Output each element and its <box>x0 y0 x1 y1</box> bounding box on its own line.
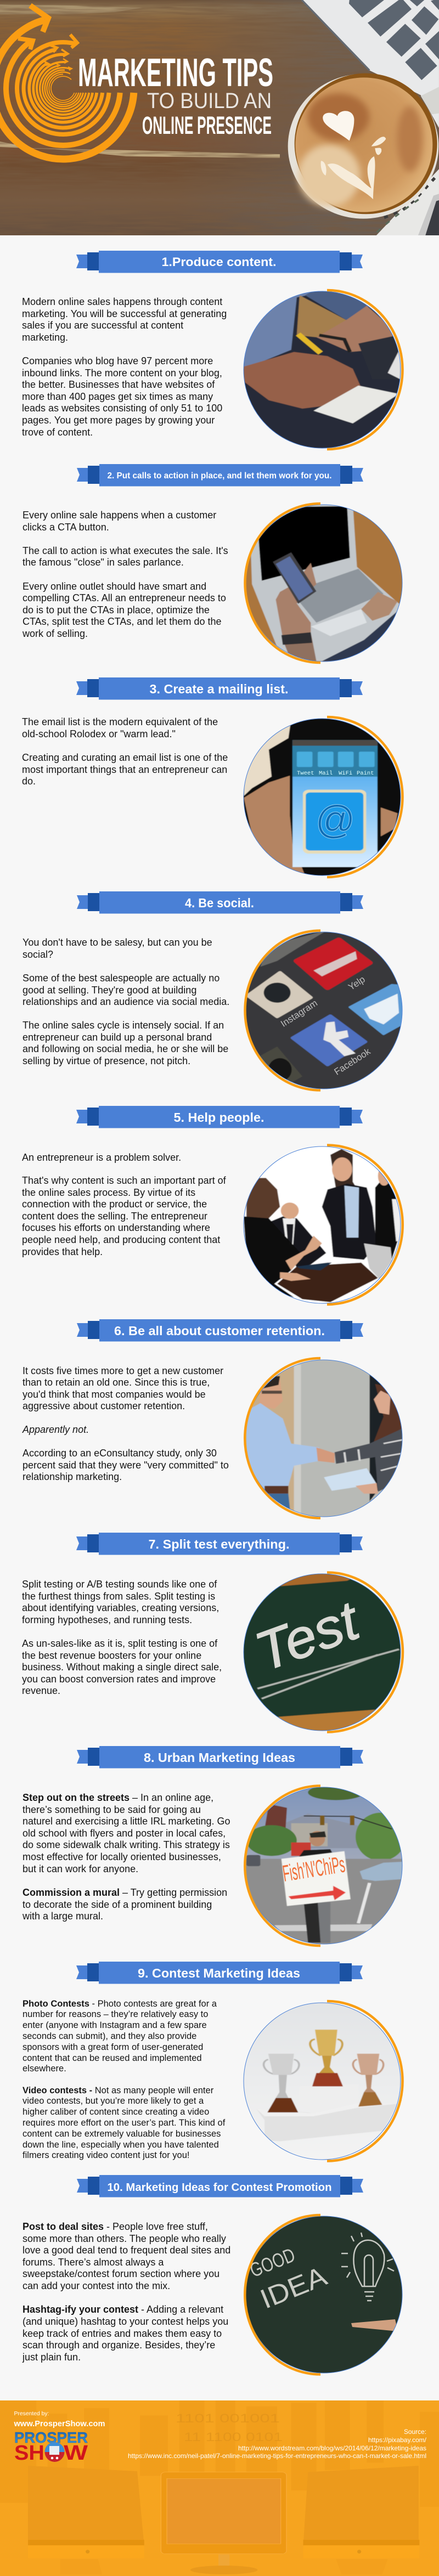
text: step out on the streets: most effective for locally oriented businesses, <box>22 1851 221 1862</box>
text: revenue boosters <box>22 1638 222 1697</box>
presenter text: Presented by: <box>14 2410 49 2417</box>
text: photo contests: content that can be reused and implemented <box>22 2053 202 2063</box>
text: split testing intro <box>22 1579 219 1626</box>
text: revenue boosters: revenue. <box>22 1685 60 1696</box>
section 2: calls to action <box>22 464 403 664</box>
text: split testing intro: Split testing or A/B testing sounds like one of <box>22 1579 217 1590</box>
text: post to deal sites: can add your contest into the mix. <box>22 2280 170 2291</box>
text: content role: people need help, and producing content that <box>22 1234 220 1245</box>
banner: 9. Contest Marketing Ideas <box>76 1962 363 1984</box>
text: photo contests: enter (anyone with Instagram and a few spare <box>22 2020 207 2030</box>
photo: chalkboard with test: Test <box>247 1589 369 1683</box>
text: revenue boosters: the best revenue boosters for your online <box>22 1650 201 1661</box>
text: hashtag-ify your contest <box>22 2304 228 2363</box>
text: step out on the streets: old school with flyers and poster in local cafes, <box>22 1828 226 1839</box>
text: split testing intro: forming hypotheses, and running tests. <box>22 1614 192 1625</box>
photo: phone and laptop <box>244 502 403 664</box>
text: eConsultancy study: percent said that they were "very committed" to <box>22 1460 229 1471</box>
text: best salespeople: relationships and an audience via social media. <box>22 996 229 1007</box>
text: content role: connection with the product or service, the <box>22 1199 207 1210</box>
banner: 10. Marketing Ideas for Contest Promotion <box>77 2175 363 2197</box>
text: compelling CTAs <box>22 581 226 639</box>
text: content role: focuses his efforts on understanding where <box>22 1222 210 1233</box>
photo: chalkboard good idea: GOOD <box>246 2243 298 2281</box>
sources: http://www.wordstream.com/blog/ws/2014/06/12/marketing-ideas <box>238 2444 426 2452</box>
text: hashtag-ify your contest: keep track of entries and makes them easy to <box>22 2328 222 2339</box>
coffee cup <box>288 74 439 236</box>
latte art heart <box>323 111 354 141</box>
text: revenue boosters: As un-sales-like as it is, split testing is one of <box>22 1638 217 1649</box>
section 4: be social <box>22 891 403 1092</box>
text: sales cycle <box>22 1020 228 1067</box>
text: blog statistics: pages. You get more pages by growing your <box>22 415 215 426</box>
text: video contests <box>22 2086 225 2161</box>
text: sales cycle: The online sales cycle is intensely social. If an <box>22 1020 224 1031</box>
text: email list equivalent: old-school Rolodex or "warm lead." <box>22 728 176 739</box>
app labels: Yelp <box>346 974 367 992</box>
text: blog statistics: inbound links. The more content on your blog, <box>22 368 222 379</box>
title: MARKETING TIPS <box>78 51 273 95</box>
text: apparently not: Apparently not. <box>22 1424 89 1435</box>
logo: Prosper Show <box>14 2429 88 2465</box>
text: email list equivalent <box>22 716 218 739</box>
logo: Prosper Show: W <box>64 2442 88 2465</box>
text: curating a list: do. <box>22 776 36 787</box>
text: sales cycle: and following on social media, he or she will be <box>22 1043 228 1054</box>
banner: 2. Put calls to action <box>77 464 363 486</box>
text: intro paragraph: marketing. You will be successful at generating <box>22 308 227 319</box>
laptop and keys <box>302 0 439 128</box>
faint binary digits: 1101 001001 <box>176 2411 280 2425</box>
photo: chalkboard good idea <box>241 2211 406 2378</box>
banner: 6. Be all about customer retention.: 6. Be all about customer retention. <box>114 1324 325 1338</box>
section 3: mailing list <box>22 677 404 879</box>
text: split testing intro: the furthest things from sales. Split testing is <box>22 1591 215 1602</box>
text: revenue boosters: business. Without making a single direct sale, <box>22 1662 222 1673</box>
section 1: produce content <box>22 251 404 451</box>
text: sales cycle: selling by virtue of presence, not pitch. <box>22 1055 190 1066</box>
text: hashtag-ify your contest: Hashtag-ify your contest - Adding a relevant <box>22 2304 223 2315</box>
section 10: contest promotion <box>0 2175 439 2400</box>
text: customer clicks: Every online sale happens when a customer <box>22 510 216 521</box>
text: photo contests: elsewhere. <box>22 2064 66 2074</box>
text: video contests: video contests, but you’re more likely to get a <box>22 2096 204 2106</box>
text: photo contests: seconds can submit), and they also provide <box>22 2031 196 2041</box>
text: the close: the famous "close" in sales parlance. <box>22 557 184 568</box>
banner: 8. Urban Marketing Ideas <box>77 1746 363 1769</box>
faint binary digits: 11 1100 0101 <box>184 2430 283 2444</box>
text: best salespeople: Some of the best salespeople are actually no <box>22 973 219 984</box>
text: intro paragraph: marketing. <box>22 332 68 343</box>
banner: 1.Produce content.: 1.Produce content. <box>161 255 277 269</box>
text: curating a list: Creating and curating an email list is one of the <box>22 752 228 763</box>
text: customer clicks <box>22 510 216 533</box>
text: video contests: higher caliber of content since creating a video <box>22 2107 209 2117</box>
text: photo contests: Photo Contests - Photo contests are great for a <box>22 1999 217 2009</box>
phone icon labels: Mail <box>319 770 333 777</box>
text: sales cycle: entrepreneur can build up a personal brand <box>22 1032 212 1043</box>
logo: Prosper Show: SH <box>14 2442 44 2465</box>
text: step out on the streets <box>22 1792 230 1875</box>
text: content role: content does the selling. The entrepreneur <box>22 1211 207 1222</box>
text: content role: the online sales process. By virtue of its <box>22 1187 195 1198</box>
text: best salespeople <box>22 973 229 1008</box>
text: curating a list <box>22 752 228 787</box>
banner: 2. Put calls to action: 2. Put calls to action in place, and let them work for you. <box>108 471 331 481</box>
text: salesy or social: social? <box>22 949 53 960</box>
photo: business people shaking hands <box>244 1144 404 1306</box>
text: blog statistics <box>22 355 222 438</box>
text: customer clicks: clicks a CTA button. <box>22 522 109 533</box>
text: cost of new customers <box>22 1365 223 1413</box>
text: blog statistics: leads as websites consisting of only 51 to 100 <box>22 403 222 414</box>
text: hashtag-ify your contest: scan through and organize. Besides, they’re <box>22 2340 215 2351</box>
text: the close: The call to action is what executes the sale. It's <box>22 545 228 556</box>
text: revenue boosters: you can boost conversion rates and improve <box>22 1674 216 1685</box>
text: problem solver: An entrepreneur is a problem solver. <box>22 1152 181 1163</box>
footer: presenter and sources <box>0 2400 439 2576</box>
photo: social media app icons <box>244 929 403 1092</box>
text: blog statistics: trove of content. <box>22 427 93 438</box>
section 9: contest marketing <box>0 1962 439 2175</box>
text: compelling CTAs: Every online outlet should have smart and <box>22 581 206 592</box>
text: split testing intro: about identifying variables, creating versions, <box>22 1602 219 1613</box>
logo: Prosper Show: PROSPER <box>14 2429 88 2446</box>
banner: 4. Be social.: 4. Be social. <box>185 896 254 910</box>
banner: 7. Split test everything.: 7. Split test everything. <box>148 1537 290 1551</box>
title: TO BUILD AN <box>147 89 272 113</box>
text: step out on the streets: naturel and exercising a little IRL marketing. Go <box>22 1816 230 1827</box>
section 6: customer retention <box>22 1319 403 1519</box>
text: post to deal sites <box>22 2221 230 2292</box>
banner: 1.Produce content. <box>76 251 363 273</box>
photo: man holding street sign: Fish'N'ChiPs <box>281 1851 347 1886</box>
app labels: Instagram <box>279 998 319 1029</box>
spiral arrows <box>0 5 134 159</box>
footer background: city and monitors <box>0 2400 439 2574</box>
text: video contests: Video contests - Not as many people will enter <box>22 2086 213 2095</box>
phone icon labels <box>297 770 373 775</box>
text: video contests: requires more effort on the user’s part. This kind of <box>22 2118 225 2128</box>
text: eConsultancy study: relationship marketing. <box>22 1471 122 1482</box>
text: photo contests: sponsors with a great form of user-generated <box>22 2042 203 2052</box>
text: commission a mural <box>22 1887 227 1923</box>
text: commission a mural: with a large mural. <box>22 1911 103 1922</box>
section 8: urban marketing <box>22 1746 403 1947</box>
presenter text <box>14 2410 105 2428</box>
photo: chalkboard with test <box>244 1571 404 1733</box>
text: intro paragraph <box>22 296 227 343</box>
text: salesy or social: You don't have to be salesy, but can you be <box>22 937 212 948</box>
text: compelling CTAs: compelling CTAs. All an entrepreneur needs to <box>22 592 226 603</box>
text: intro paragraph: Modern online sales happens through content <box>22 296 222 307</box>
photo: hand writing <box>244 289 404 451</box>
text: photo contests <box>22 1999 217 2075</box>
wood background <box>0 0 439 235</box>
text: eConsultancy study: According to an eConsultancy study, only 30 <box>22 1448 217 1459</box>
text: video contests: filmers creating video content just for you! <box>22 2150 189 2160</box>
text: step out on the streets: Step out on the streets – In an online age, <box>22 1792 213 1803</box>
app labels <box>279 974 373 1077</box>
text: intro paragraph: sales if you are successful at content <box>22 320 183 331</box>
text: commission a mural: to decorate the side of a prominent building <box>22 1899 212 1910</box>
app labels: Facebook <box>333 1046 373 1077</box>
text: salesy or social <box>22 937 212 960</box>
text: curating a list: most important things that an entrepreneur can <box>22 764 227 775</box>
text: content role: provides that help. <box>22 1246 103 1257</box>
photo: man holding street sign <box>241 1782 406 1949</box>
text: post to deal sites: Post to deal sites - People love free stuff, <box>22 2221 208 2232</box>
text: compelling CTAs: CTAs, split test the CTAs, and let them do the <box>22 616 222 627</box>
text: the close <box>22 545 228 568</box>
title: ONLINE PRESENCE <box>142 111 272 139</box>
sources: Source: <box>404 2428 426 2436</box>
banner: 10. Marketing Ideas for Contest Promotion: 10. Marketing Ideas for Contest Promotion <box>108 2181 331 2194</box>
banner: 5. Help people.: 5. Help people. <box>173 1110 264 1125</box>
text: commission a mural: Commission a mural – Try getting permission <box>22 1887 227 1898</box>
photo: handshake in office <box>244 1357 403 1519</box>
text: step out on the streets: do some sidewalk chalk writing. This strategy is <box>22 1839 230 1850</box>
text: step out on the streets: there’s something to be said for going au <box>22 1804 201 1815</box>
text: cost of new customers: aggressive about customer retention. <box>22 1400 185 1411</box>
text: best salespeople: good at selling. They're good at building <box>22 985 196 996</box>
photo: chalkboard good idea: IDEA <box>256 2261 331 2315</box>
presenter text: www.ProsperShow.com <box>14 2419 105 2428</box>
section 5: help people <box>22 1106 404 1306</box>
text: blog statistics: more than 400 pages get six times as many <box>22 391 213 402</box>
banner: 3. Create a mailing list.: 3. Create a mailing list. <box>149 682 289 696</box>
banner: 3. Create a mailing list. <box>76 677 363 700</box>
text: hashtag-ify your contest: just plain fun. <box>22 2352 81 2363</box>
phone icon labels: Paint <box>357 770 374 777</box>
text: blog statistics: the better. Businesses that have websites of <box>22 379 215 390</box>
text: post to deal sites: sweepstake/contest forum section where you <box>22 2268 219 2279</box>
text: video contests: content can be extremely valuable for businesses <box>22 2129 221 2139</box>
text: video contests: down the line, especially when you have talented <box>22 2140 219 2150</box>
sources: https://pixabay.com/ <box>368 2436 427 2444</box>
banner: 9. Contest Marketing Ideas: 9. Contest Marketing Ideas <box>138 1966 300 1980</box>
text: hashtag-ify your contest: (and unique) hashtag to your contest helps you <box>22 2316 228 2327</box>
text: post to deal sites: love a good deal tend to frequent deal sites and <box>22 2245 230 2256</box>
text: cost of new customers: you'd think that most companies would be <box>22 1389 206 1400</box>
text: step out on the streets: but it can work for anyone. <box>22 1863 138 1874</box>
text: content role <box>22 1175 226 1258</box>
text: cost of new customers: It costs five times more to get a new customer <box>22 1365 223 1376</box>
text: content role: That's why content is such an important part of <box>22 1175 226 1186</box>
text: compelling CTAs: do is to put the CTAs in place, optimize the <box>22 605 210 615</box>
header: hero photo with title <box>0 0 439 235</box>
sources: https://www.inc.com/neil-patel/7-online-marketing-tips-for-entrepreneurs-who-can-t-market-or-sale.html <box>128 2452 426 2460</box>
text: eConsultancy study <box>22 1448 229 1483</box>
phone icon labels: Tweet <box>297 770 314 777</box>
text: cost of new customers: than to retain an old one. Since this is true, <box>22 1377 210 1388</box>
sources <box>128 2428 427 2460</box>
faint binary digits <box>176 2411 283 2444</box>
title <box>79 58 272 134</box>
text: email list equivalent: The email list is the modern equivalent of the <box>22 716 218 727</box>
text: blog statistics: Companies who blog have 97 percent more <box>22 355 213 366</box>
banner: 5. Help people. <box>76 1106 363 1128</box>
banner: 7. Split test everything. <box>76 1533 363 1555</box>
photo: phone with at sign: @ <box>315 798 356 842</box>
banner: 8. Urban Marketing Ideas: 8. Urban Marketing Ideas <box>144 1750 295 1765</box>
text: post to deal sites: some more than others. The people who really <box>22 2233 226 2244</box>
photo: phone with at sign <box>244 715 404 879</box>
text: photo contests: number for reasons – they’re relatively easy to <box>22 2009 208 2019</box>
banner: 6. Be all about customer retention. <box>77 1319 363 1342</box>
text: compelling CTAs: work of selling. <box>22 628 88 639</box>
photo: trophies on podium <box>241 1998 406 2165</box>
phone icon labels: WiFi <box>339 770 352 777</box>
section 7: split test <box>22 1533 404 1733</box>
banner: 4. Be social. <box>77 891 363 914</box>
text: post to deal sites: forums. There’s almost always a <box>22 2257 164 2268</box>
